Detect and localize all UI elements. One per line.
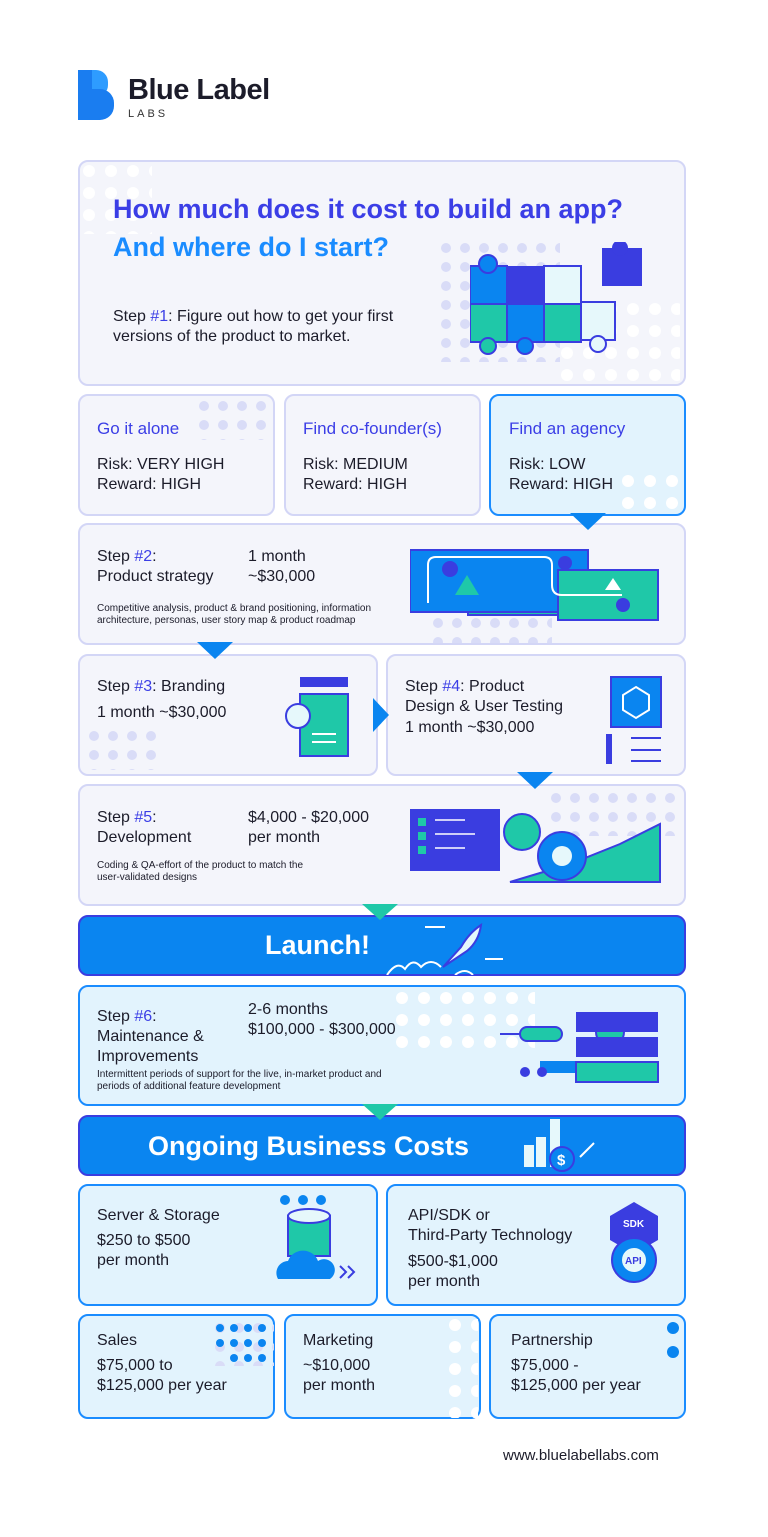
panel: step 5: per month bbox=[248, 829, 320, 846]
panel: step 6: Maintenance & bbox=[97, 1028, 204, 1045]
panel: go it alone: Reward: HIGH bbox=[97, 476, 201, 493]
panel: co-founder: Find co-founder(s) bbox=[303, 419, 442, 438]
panel: step 6: Intermittent periods of support for the live, in-market product and bbox=[97, 1069, 382, 1080]
panel: step 6: $100,000 - $300,000 bbox=[248, 1021, 396, 1038]
panel: step 6 bbox=[78, 985, 686, 1106]
text: step 1 bbox=[113, 308, 394, 345]
panel: step 5 bbox=[78, 784, 686, 906]
panel: step 3: 1 month ~$30,000 bbox=[97, 704, 226, 721]
panel: server bbox=[78, 1184, 378, 1306]
panel: step 3 bbox=[78, 654, 378, 776]
panel: step 4: 1 month ~$30,000 bbox=[405, 719, 534, 736]
panel: api: per month bbox=[408, 1273, 480, 1290]
icon: branding bbox=[285, 677, 349, 757]
text: step 1: versions of the product to market. bbox=[113, 328, 350, 345]
panel: step 2 bbox=[78, 523, 686, 645]
panel: agency bbox=[489, 394, 686, 516]
panel: step 2: Product strategy bbox=[97, 568, 214, 585]
panel: server: per month bbox=[97, 1252, 169, 1269]
panel: api: $500-$1,000 bbox=[408, 1253, 498, 1270]
icon: development bbox=[410, 809, 661, 883]
panel: step 2: Step #2: bbox=[97, 548, 157, 565]
icon: chart bbox=[524, 1119, 595, 1172]
panel: step 2: architecture, personas, user story map & product roadmap bbox=[97, 615, 355, 626]
panel: step 6: 2-6 months bbox=[248, 1001, 328, 1018]
panel: go it alone: Risk: VERY HIGH bbox=[97, 456, 224, 473]
icon: chart: $ bbox=[557, 1152, 566, 1169]
icon: api sdk: API bbox=[625, 1256, 642, 1267]
panel: marketing: Marketing bbox=[303, 1332, 373, 1349]
panel: partnership: $75,000 - bbox=[511, 1357, 579, 1374]
panel: step 5: user-validated designs bbox=[97, 872, 197, 883]
panel: go it alone bbox=[78, 394, 275, 516]
arrow: agency to step 2 bbox=[570, 513, 606, 530]
panel: step 4: Design & User Testing bbox=[405, 698, 563, 715]
panel: step 1 intro bbox=[78, 160, 686, 386]
icon: api sdk bbox=[610, 1202, 658, 1283]
panel: partnership: Partnership bbox=[511, 1332, 593, 1349]
arrow: step3 to step4 bbox=[373, 698, 389, 732]
panel: step 4 bbox=[386, 654, 686, 776]
arrow: step4 to step5 bbox=[517, 772, 553, 789]
panel: marketing: per month bbox=[303, 1377, 375, 1394]
logo: Blue Label bbox=[128, 74, 270, 106]
panel: step 5: $4,000 - $20,000 bbox=[248, 809, 369, 826]
panel: sales bbox=[78, 1314, 275, 1419]
panel: sales: $75,000 to bbox=[97, 1357, 173, 1374]
icon: logo B bbox=[78, 70, 114, 120]
panel: step 5: Development bbox=[97, 829, 191, 846]
panel: co-founder: Reward: HIGH bbox=[303, 476, 407, 493]
panel: partnership: $125,000 per year bbox=[511, 1377, 641, 1394]
panel: step 6: Improvements bbox=[97, 1048, 198, 1065]
arrow: to launch bbox=[362, 904, 398, 920]
icon: maintenance bbox=[500, 1012, 659, 1083]
title: And where do I start? bbox=[113, 232, 389, 262]
panel: sales: Sales bbox=[97, 1332, 137, 1349]
title bbox=[113, 194, 623, 262]
band: launch bbox=[78, 915, 686, 976]
panel: step 5: Coding & QA-effort of the product to match the bbox=[97, 860, 303, 871]
panel: go it alone: Go it alone bbox=[97, 419, 179, 438]
panel: api bbox=[386, 1184, 686, 1306]
panel: marketing bbox=[284, 1314, 481, 1419]
title: How much does it cost to build an app? bbox=[113, 194, 623, 224]
panel: agency: Reward: HIGH bbox=[509, 476, 613, 493]
panel: sales: $125,000 per year bbox=[97, 1377, 227, 1394]
icon: database bbox=[276, 1195, 356, 1279]
panel: step 5: Step #5: bbox=[97, 809, 157, 826]
band: ongoing business costs bbox=[78, 1115, 686, 1176]
panel: step 6: Step #6: bbox=[97, 1008, 157, 1025]
panel: marketing: ~$10,000 bbox=[303, 1357, 370, 1374]
panel: agency: Risk: LOW bbox=[509, 456, 585, 473]
icon: rocket bbox=[386, 923, 503, 975]
band: ongoing business costs: Ongoing Business Costs bbox=[148, 1131, 469, 1161]
panel: agency: Find an agency bbox=[509, 419, 625, 438]
panel: step 2: Competitive analysis, product & brand positioning, information bbox=[97, 603, 371, 614]
panel: step 3: Step #3: Branding bbox=[97, 678, 225, 695]
logo bbox=[78, 70, 270, 120]
panel: partnership bbox=[489, 1314, 686, 1419]
arrow: to ongoing bbox=[362, 1104, 398, 1120]
panel: api: Third-Party Technology bbox=[408, 1227, 572, 1244]
footer url: www.bluelabellabs.com bbox=[503, 1447, 659, 1464]
panel: server: $250 to $500 bbox=[97, 1232, 190, 1249]
panel: step 6: periods of additional feature development bbox=[97, 1081, 280, 1092]
icon: api sdk: SDK bbox=[623, 1219, 645, 1230]
panel: server: Server & Storage bbox=[97, 1207, 220, 1224]
icon: design cube bbox=[606, 676, 662, 764]
arrow: step2 to step3 bbox=[197, 642, 233, 659]
panel: co-founder bbox=[284, 394, 481, 516]
text: step 1: Step #1: Figure out how to get your first bbox=[113, 308, 393, 325]
band: launch: Launch! bbox=[265, 930, 370, 960]
logo: LABS bbox=[128, 108, 168, 120]
icon: puzzle bbox=[470, 242, 642, 355]
panel: step 2: 1 month bbox=[248, 548, 306, 565]
panel: api: API/SDK or bbox=[408, 1207, 490, 1224]
panel: step 4: Step #4: Product bbox=[405, 678, 524, 695]
icon: roadmap bbox=[410, 549, 659, 621]
panel: step 2: ~$30,000 bbox=[248, 568, 315, 585]
panel: co-founder: Risk: MEDIUM bbox=[303, 456, 408, 473]
